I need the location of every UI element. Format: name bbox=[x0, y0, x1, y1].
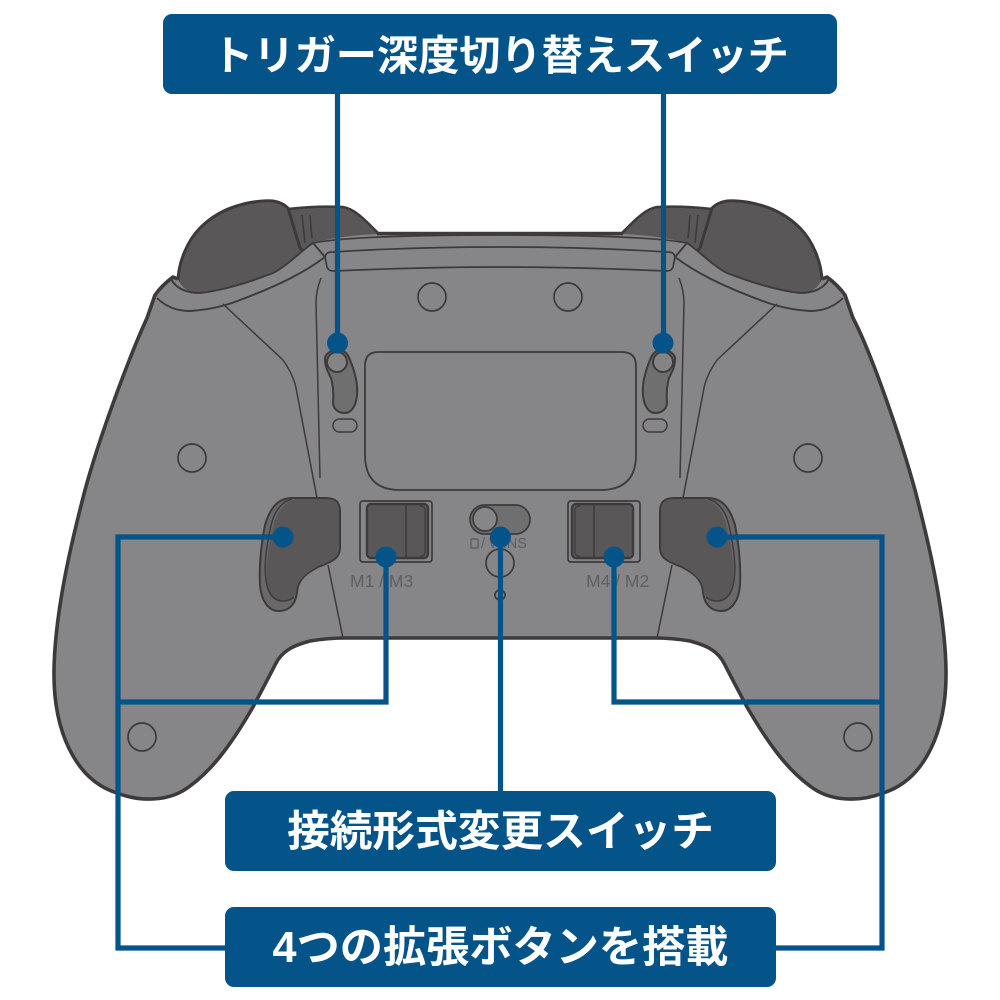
heading: four extension buttons bbox=[225, 907, 776, 987]
label M4 / M2: M4 / M2 bbox=[586, 571, 649, 591]
left body details bbox=[157, 243, 432, 638]
heading: trigger depth switch: トリガー深度切り替えスイッチ bbox=[212, 33, 789, 79]
leader lines bbox=[118, 94, 882, 948]
connection toggle switch bbox=[470, 505, 530, 600]
screws bbox=[128, 283, 872, 751]
right trigger and bumper bbox=[621, 201, 822, 300]
right body details bbox=[568, 243, 843, 638]
touch pad panel bbox=[365, 352, 636, 490]
controller bbox=[54, 201, 946, 799]
leader dots bbox=[272, 332, 728, 568]
label M1 / M3: M1 / M3 bbox=[350, 571, 413, 591]
heading: four extension buttons: 4つの拡張ボタンを搭載 bbox=[273, 924, 728, 972]
heading: connection mode switch bbox=[225, 791, 776, 871]
left trigger and bumper bbox=[178, 201, 379, 300]
top edge panel lines bbox=[313, 235, 687, 271]
heading: trigger depth switch bbox=[163, 14, 837, 94]
controller body outline bbox=[54, 234, 946, 799]
switch labels: / WINS bbox=[481, 536, 527, 552]
heading: connection mode switch: 接続形式変更スイッチ bbox=[287, 808, 714, 856]
controller body fill bbox=[54, 233, 946, 799]
